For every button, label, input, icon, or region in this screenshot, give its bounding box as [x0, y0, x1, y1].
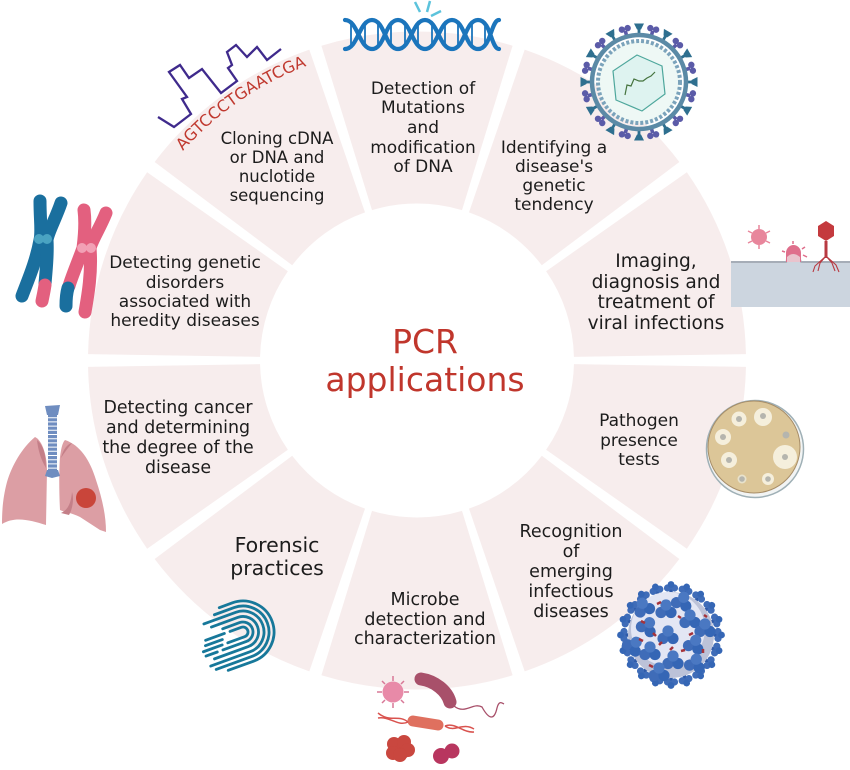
icon: fingerprint — [191, 592, 283, 676]
text: genetic disorders: Detecting genetic — [109, 253, 261, 273]
icon: microbes — [377, 676, 504, 764]
panel: pathogen presence — [530, 316, 759, 553]
panel: genetic tendency — [428, 38, 688, 295]
title — [325, 322, 525, 399]
icon: lungs with tumour — [2, 405, 106, 532]
text: viral infections: Imaging, — [615, 251, 697, 272]
text: cloning: sequencing — [230, 186, 324, 205]
panel: viral infections — [530, 168, 759, 405]
icon: chromosomes — [22, 201, 106, 312]
text: emerging diseases: diseases — [533, 602, 609, 622]
text: emerging diseases: infectious — [528, 582, 614, 602]
text: detecting cancer: and determining — [106, 418, 250, 438]
text: pathogen tests: tests — [618, 450, 660, 470]
panel: detection of mutations — [321, 32, 513, 210]
text: genetic tendency: disease's — [515, 157, 593, 177]
text: microbe detection: Microbe — [391, 590, 459, 610]
text: genetic tendency: genetic — [522, 176, 586, 196]
text: cloning: Cloning cDNA — [221, 129, 334, 148]
text: detecting cancer: the degree of the — [102, 438, 254, 458]
panel: genetic disorders — [75, 168, 304, 405]
text: DNA sequence: AGTCCCTGAATCGA — [177, 56, 306, 151]
panel: detecting cancer — [75, 316, 304, 553]
text: viral infections: treatment of — [597, 292, 715, 313]
icon: cell surface with viruses — [731, 221, 850, 307]
text: detecting cancer: Detecting cancer — [103, 398, 253, 418]
icon: petri dish — [706, 400, 804, 498]
text: detection of mutations: Mutations — [381, 98, 465, 118]
text: genetic disorders: disorders — [146, 273, 224, 293]
text: microbe detection: characterization — [354, 629, 496, 649]
title: PCR — [392, 322, 458, 361]
text: viral infections: diagnosis and — [592, 272, 720, 293]
text: emerging diseases: Recognition — [519, 522, 623, 542]
text: forensic practices: practices — [230, 556, 324, 580]
text: detection of mutations: modification — [370, 138, 476, 158]
diplococcus — [433, 744, 460, 764]
panel: cloning and sequencing — [146, 38, 406, 295]
panel: forensic practices — [146, 426, 406, 683]
text: genetic tendency: Identifying a — [501, 138, 607, 158]
text: detecting cancer: disease — [145, 458, 211, 478]
icon: enveloped virus — [580, 24, 698, 140]
icon: DNA helix — [345, 1, 499, 49]
spiral bacterium — [421, 679, 504, 717]
text: detection of mutations: and — [407, 118, 439, 138]
virus — [377, 676, 409, 708]
icon: sequencing trace — [158, 45, 281, 127]
title: applications — [325, 360, 525, 399]
text: viral infections: viral infections — [588, 313, 724, 334]
panel: emerging diseases — [428, 426, 688, 683]
text: pathogen tests: presence — [600, 431, 678, 451]
text: forensic practices: Forensic — [235, 533, 319, 557]
text: genetic disorders: heredity diseases — [110, 311, 260, 331]
text: cloning: nuclotide — [239, 167, 315, 186]
text: pathogen tests: Pathogen — [599, 411, 679, 431]
panel: microbe detection — [321, 511, 513, 689]
icon: coronavirus — [617, 581, 725, 689]
text: emerging diseases: emerging — [529, 562, 613, 582]
text: emerging diseases: of — [563, 542, 580, 562]
wheel of ten sectors — [75, 32, 759, 689]
text: detection of mutations: Detection of — [371, 79, 476, 99]
text: genetic tendency: tendency — [514, 195, 594, 215]
rod bacterium — [378, 713, 474, 732]
text: detection of mutations: of DNA — [393, 157, 453, 177]
coccus cluster — [386, 735, 415, 762]
text: cloning: or DNA and — [230, 148, 324, 167]
text: genetic disorders: associated with — [119, 292, 251, 312]
text: microbe detection: detection and — [364, 610, 486, 630]
